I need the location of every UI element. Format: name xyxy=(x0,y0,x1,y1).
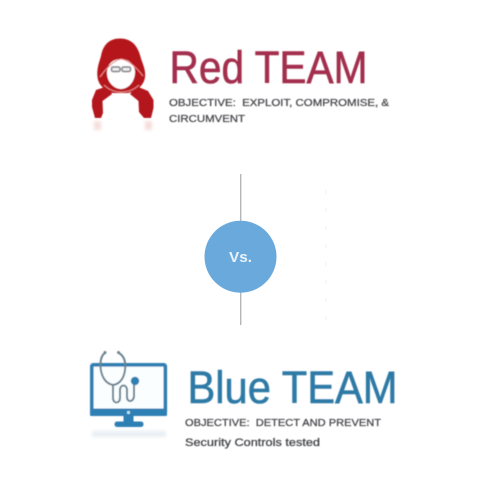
face xyxy=(107,59,135,89)
glasses xyxy=(112,67,130,72)
text: security controls tested: Security Controls tested xyxy=(185,437,320,449)
heading: Blue TEAM: Blue TEAM xyxy=(188,362,398,413)
text: red team objective: OBJECTIVE: EXPLOIT, COMPROMISE, & xyxy=(169,98,389,109)
reflection xyxy=(92,431,166,437)
stethoscope xyxy=(100,353,134,402)
badge: Vs. xyxy=(204,221,276,293)
icon: monitor with stethoscope xyxy=(90,351,167,437)
panel: blue team xyxy=(90,351,398,449)
heading: Red TEAM: Red TEAM xyxy=(170,42,368,93)
badge: Vs.: Vs. xyxy=(229,250,252,266)
faint dotted line xyxy=(325,190,327,325)
reflection xyxy=(94,121,152,130)
text: red team objective continued: CIRCUMVENT xyxy=(169,114,246,125)
text: blue team objective: OBJECTIVE: DETECT AND PREVENT xyxy=(185,418,382,429)
divider: vertical line xyxy=(240,174,241,325)
panel: red team xyxy=(92,38,389,130)
icon: red hooded hacker xyxy=(92,38,154,130)
hood rim xyxy=(100,59,143,77)
